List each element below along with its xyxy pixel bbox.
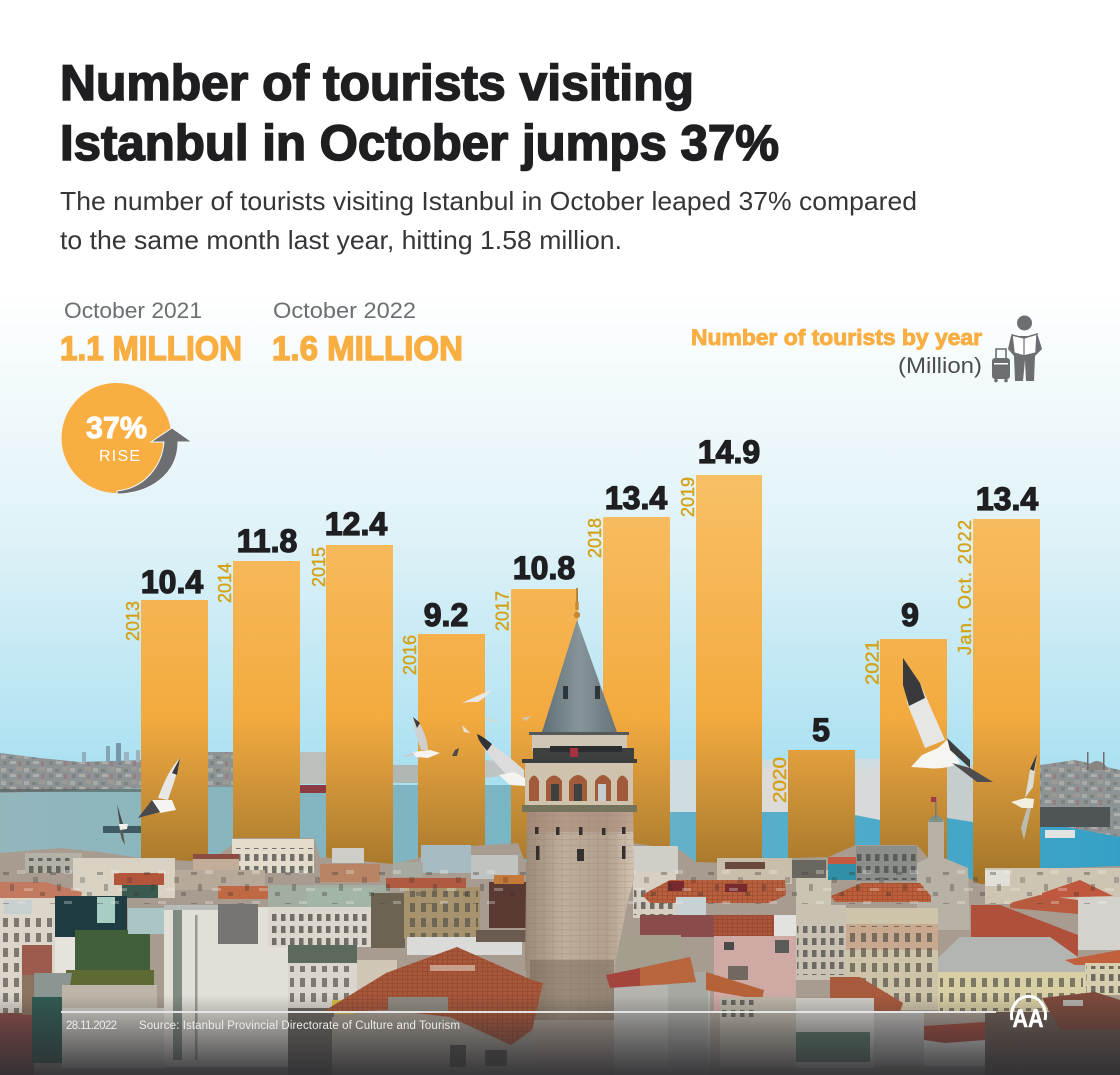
bar 2016: 9.2 — [400, 597, 485, 859]
stat: October 2021: October 2021 — [64, 298, 202, 323]
seagull: small water — [103, 804, 141, 845]
37% rise badge — [62, 383, 192, 494]
tower arches — [529, 775, 628, 801]
seagulls — [103, 658, 1037, 845]
cityscape photo illustration — [0, 797, 1120, 1075]
37% rise badge: 37% — [86, 410, 147, 445]
footer: date and source — [61, 1011, 996, 1032]
distant shoreline and water — [0, 743, 1120, 885]
icon: tourist with map and suitcase — [992, 316, 1042, 382]
title — [60, 55, 779, 171]
title: Number of tourists visiting — [60, 55, 694, 111]
left district — [25, 853, 82, 873]
icon: Galata Tower — [522, 588, 637, 1020]
bar 2020: 5: 5 — [812, 712, 830, 748]
bar 2021: 9: 9 — [901, 597, 919, 633]
bar 2018: 13.4: 2018 — [585, 518, 605, 558]
bar 2016: 9.2: 2016 — [400, 635, 420, 675]
seagull: large right — [903, 658, 993, 782]
legend heading — [691, 325, 982, 378]
stat: October 2021 — [60, 298, 242, 368]
bar 2019: 14.9: 14.9 — [698, 434, 760, 470]
footer: date and source: 28.11.2022 — [66, 1020, 117, 1032]
bar 2015: 12.4: 12.4 — [325, 506, 387, 542]
stat: October 2022 — [272, 298, 463, 368]
bar 2017: 10.8: 2017 — [492, 591, 512, 631]
bar 2019: 14.9 — [678, 434, 762, 865]
bar 2015: 12.4 — [309, 506, 393, 865]
bar 2021: 9: 2021 — [862, 640, 882, 685]
footer: date and source: Source: Istanbul Provincial Directorate of Culture and Tourism — [139, 1020, 460, 1032]
stat: October 2022: October 2022 — [273, 298, 416, 323]
legend heading: Number of tourists by year — [691, 325, 982, 350]
footer shade — [0, 995, 1120, 1075]
title: Istanbul in October jumps 37% — [60, 115, 779, 171]
seagull: small right — [1011, 754, 1037, 840]
stat: October 2022: 1.6 MILLION — [272, 330, 463, 368]
bar Jan-Oct 2022: 13.4: Jan. Oct. 2022 — [955, 520, 975, 655]
seagull: 2013 bar — [138, 758, 180, 818]
bar 2013: 10.4: 10.4 — [141, 564, 203, 600]
subtitle: to the same month last year, hitting 1.58 million. — [60, 225, 622, 255]
bar Jan-Oct 2022: 13.4: 13.4 — [976, 481, 1038, 517]
bar 2018: 13.4: 13.4 — [605, 480, 667, 516]
bar 2021: 9 — [862, 597, 947, 864]
mid-left district — [232, 839, 314, 873]
bar 2016: 9.2: 9.2 — [424, 597, 468, 633]
bar 2020: 5 — [770, 712, 855, 862]
bar Jan-Oct 2022: 13.4 — [955, 481, 1040, 885]
foreground rooftops in front of tower — [321, 947, 696, 1075]
stat: October 2021: 1.1 MILLION — [60, 330, 242, 368]
logo: Anadolu Agency: AA — [1012, 1005, 1044, 1033]
subtitle — [60, 186, 917, 255]
bar 2014: 11.8 — [215, 523, 300, 857]
bar 2017: 10.8: 10.8 — [513, 550, 575, 586]
bar 2014: 11.8: 2014 — [215, 563, 235, 603]
subtitle: The number of tourists visiting Istanbul in October leaped 37% compared — [60, 186, 917, 216]
bar 2015: 12.4: 2015 — [309, 547, 329, 587]
bar 2014: 11.8: 11.8 — [237, 523, 297, 559]
bar chart — [123, 434, 1040, 885]
legend heading: (Million) — [898, 353, 982, 378]
bar 2020: 5: 2020 — [770, 757, 790, 803]
bar 2018: 13.4 — [585, 480, 670, 847]
bar 2017: 10.8 — [492, 550, 578, 859]
bar 2013: 10.4 — [123, 564, 208, 862]
bar 2013: 10.4: 2013 — [123, 601, 143, 641]
bar 2019: 14.9: 2019 — [678, 477, 698, 517]
seagull: small flock — [452, 689, 531, 756]
right of tower — [633, 846, 678, 874]
37% rise badge: RISE — [99, 448, 140, 465]
logo: Anadolu Agency — [1012, 996, 1046, 1033]
seagull: beside tower — [477, 734, 525, 786]
seagull: 2016 left — [400, 717, 440, 758]
